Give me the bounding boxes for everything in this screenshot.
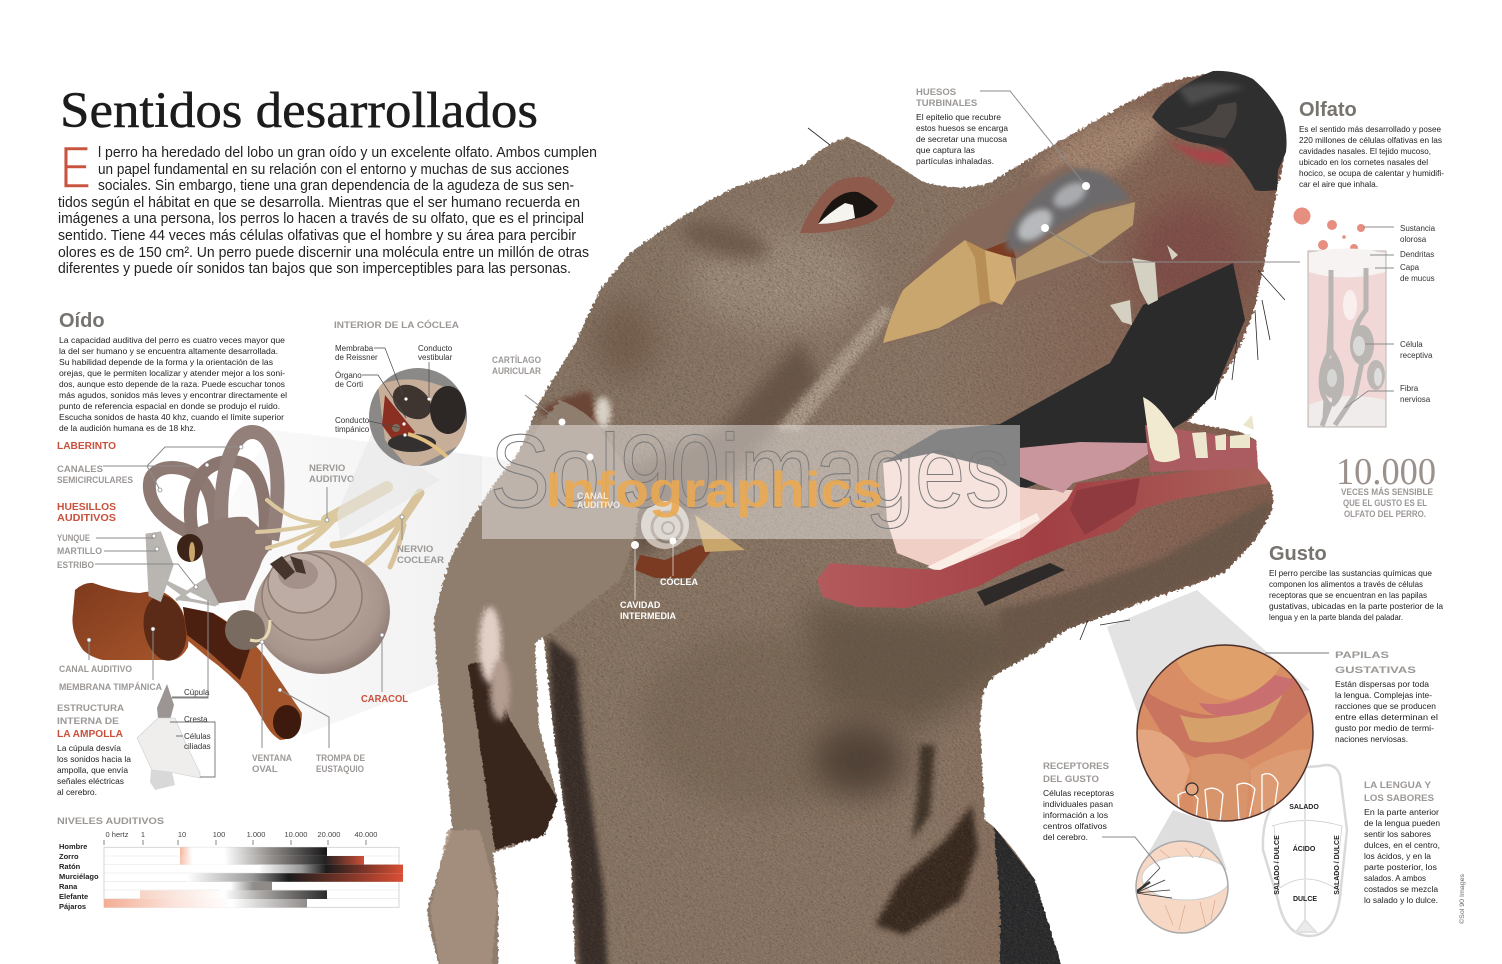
heading: Oído: Oído (59, 310, 105, 332)
frequency axis (106, 830, 377, 839)
leader lines: olfactory (1345, 227, 1394, 408)
heading: Olfato: Olfato (1299, 99, 1357, 121)
text block: Olfato: cavidades nasales. El tejido mucoso, (1299, 146, 1431, 156)
labels: olfactory: nerviosa (1400, 395, 1431, 404)
label: CARACOL: CARACOL (361, 693, 409, 705)
text block: ampulla: La cúpula desvía (57, 743, 121, 753)
labels: olfactory: Fibra (1400, 384, 1419, 393)
label: HUESOS TURBINALES: HUESOS (916, 87, 956, 98)
labels: ossicles (57, 533, 102, 571)
text block: huesos turbinales: estos huesos se encarga (916, 123, 1008, 133)
panel: grey magnifying wedge from ear to inner-ear diagram (230, 430, 640, 735)
text block: Oído (59, 335, 287, 433)
tissue block (1308, 251, 1386, 427)
text block: PAPILAS GUSTATIVAS: PAPILAS (1335, 650, 1389, 661)
text block: PAPILAS GUSTATIVAS: Están dispersas por toda (1335, 679, 1429, 689)
label: HUESILLOS AUDITIVOS (57, 501, 116, 524)
intro text: diferentes y puede oír sonidos tan bajos que son imperceptibles para las personas. (58, 260, 571, 277)
illustration: ampulla internal structure (137, 684, 215, 790)
label: CAVIDAD INTERMEDIA: INTERMEDIA (620, 611, 676, 621)
callout: 10.000: VECES MÁS SENSIBLE (1341, 487, 1433, 498)
text block: Gusto: El perro percibe las sustancias químicas que (1269, 568, 1432, 578)
text block: Oído: dos, aunque esto depende de la raza. Puede escuchar tonos (59, 379, 285, 389)
labels: cochlea parts: de Corti (335, 380, 363, 389)
label: NERVIO AUDITIVO: NERVIO (309, 463, 345, 474)
leader lines: nasal (980, 91, 1300, 262)
text block: LA LENGUA Y LOS SABORES: salados. A ambos (1364, 873, 1426, 883)
text block: LA LENGUA Y LOS SABORES: LA LENGUA Y (1364, 780, 1432, 791)
text block: LA LENGUA Y LOS SABORES (1364, 780, 1440, 905)
text block: PAPILAS GUSTATIVAS (1335, 650, 1438, 744)
text block: Olfato: hocico, se ocupa de calentar y humidifi- (1299, 168, 1444, 178)
ossicles: anvil, hammer, stirrup (147, 533, 218, 605)
gums (1145, 425, 1258, 472)
text block: Oído: punto de referencia espacial en donde se produjo el ruido. (59, 401, 280, 411)
panel: Gusto (1269, 543, 1443, 622)
receptor cells (1321, 270, 1342, 426)
frequency axis: 1 (141, 830, 145, 839)
text block: ampulla: al cerebro. (57, 787, 97, 797)
copyright: ©Sol 90 Images (1458, 873, 1466, 924)
frequency axis: 20.000 (318, 830, 340, 839)
label: NERVIO AUDITIVO: AUDITIVO (309, 474, 354, 485)
intro text: l perro ha heredado del lobo un gran oído y un excelente olfato. Ambos cumplen (98, 144, 597, 161)
text block: ampulla: los sonidos hacia la (57, 754, 131, 764)
text block: Oído: más agudos, sonidos más leves y encontrar directamente el (59, 390, 287, 400)
leader lines: ear labels (635, 541, 673, 600)
text block: LA LENGUA Y LOS SABORES: los ácidos, y en la (1364, 851, 1431, 861)
text block: Olfato (1299, 124, 1444, 189)
tongue labels: SALADO (1289, 804, 1319, 811)
tongue labels: DULCE (1293, 896, 1317, 903)
labels: ossicles: ESTRIBO (57, 560, 94, 571)
text block: huesos turbinales: de secretar una mucosa (916, 134, 1007, 144)
text block: ampulla: INTERNA DE (57, 716, 119, 727)
label: HUESILLOS AUDITIVOS: AUDITIVOS (57, 512, 116, 524)
chart: cochlea cross-section (337, 368, 470, 540)
tongue (1020, 442, 1150, 493)
callout: 10.000 (1336, 451, 1436, 520)
dog shading (538, 94, 1272, 964)
labels: ossicles: MARTILLO (57, 546, 102, 557)
heading: NIVELES AUDITIVOS: NIVELES AUDITIVOS (57, 816, 164, 827)
labels: ampulla parts (184, 688, 211, 751)
shadow under lip (977, 563, 1065, 606)
intro text: sentido. Tiene 44 veces más células olfativas que el hombre y su área para percibir (58, 227, 576, 244)
text block: PAPILAS GUSTATIVAS: racciones que se producen (1335, 701, 1436, 711)
text block: Gusto: componen los alimentos a través de células (1269, 579, 1423, 589)
label: VENTANA OVAL: VENTANA (252, 753, 292, 764)
labels: olfactory: de mucus (1400, 274, 1435, 283)
text block: huesos turbinales: El epitelio que recubre (916, 112, 1001, 122)
text block: LA LENGUA Y LOS SABORES: LOS SABORES (1364, 793, 1434, 804)
leader line: receptor (1102, 837, 1160, 868)
eustachian tube (183, 607, 302, 740)
label: LABERINTO: LABERINTO (57, 440, 116, 452)
watermark: Infographics: Infographics (546, 462, 883, 518)
label: CANAL AUDITIVO on dog: CANAL (577, 491, 609, 501)
text block: Olfato: ubicado en los cornetes nasales del (1299, 157, 1428, 167)
odor molecules (1294, 208, 1365, 263)
tongue labels (1274, 804, 1341, 903)
watermark: Sol90images: Sol90images (490, 414, 1010, 530)
label: CARTÍLAGO AURICULAR: CARTÍLAGO (492, 355, 541, 366)
label: CANAL AUDITIVO on dog: AUDITIVO (577, 500, 620, 510)
text block: Oído: Escucha sonidos de hasta 40 khz, cuando el límite superior (59, 412, 284, 422)
cochlear nerve (333, 493, 420, 567)
tongue labels: SALADO / DULCE (1274, 835, 1281, 895)
illustration: nasal cavity cutaway (883, 163, 1138, 343)
row labels: Elefante (59, 892, 88, 901)
semicircular canals (149, 468, 216, 540)
leader line: papilas (1265, 652, 1329, 654)
text block: ampulla: LA AMPOLLA (57, 728, 123, 740)
label: CANAL AUDITIVO on dog (577, 491, 620, 510)
label: NERVIO AUDITIVO (309, 463, 354, 485)
chart: hearing levels (57, 816, 403, 911)
frequency axis: 10.000 (285, 830, 307, 839)
label: CAVIDAD INTERMEDIA (620, 600, 676, 621)
lower lip (817, 467, 1270, 608)
label: CARTÍLAGO AURICULAR: AURICULAR (492, 366, 541, 377)
callout: 10.000: 10.000 (1336, 451, 1436, 493)
frequency axis: 10 (178, 830, 186, 839)
panel: Oído text (59, 310, 287, 433)
labels: cochlea parts: Conducto (335, 416, 370, 425)
text block: LA LENGUA Y LOS SABORES: En la parte anterior (1364, 807, 1439, 817)
text block: RECEPTORES DEL GUSTO: DEL GUSTO (1043, 774, 1099, 785)
text block: RECEPTORES DEL GUSTO: Células receptoras (1043, 788, 1114, 798)
diagram: olfactory epithelium (1294, 208, 1436, 427)
labels: ossicles: YUNQUE (57, 533, 90, 544)
text block: LA LENGUA Y LOS SABORES: parte posterior, los (1364, 862, 1437, 872)
label: CARTÍLAGO AURICULAR (492, 355, 541, 377)
callout: 10.000: OLFATO DEL PERRO. (1344, 509, 1426, 520)
heading: Gusto: Gusto (1269, 543, 1327, 565)
text block: ampulla: señales eléctricas (57, 776, 124, 786)
row labels: Rana (59, 882, 78, 891)
row labels: Zorro (59, 852, 79, 861)
drop cap E: E (60, 134, 91, 201)
frequency axis: 0 hertz (106, 830, 129, 839)
text block: PAPILAS GUSTATIVAS: entre ellas determinan el (1335, 712, 1438, 722)
labels: ampulla parts: Cúpula (184, 688, 210, 697)
label: CANALES SEMICIRCULARES: CANALES (57, 464, 103, 475)
text block: huesos turbinales: partículas inhaladas. (916, 156, 994, 166)
illustration: dog ear (427, 397, 640, 964)
label: CAVIDAD INTERMEDIA: CAVIDAD (620, 600, 661, 610)
dots: nasal (1041, 182, 1090, 232)
tongue labels: ÁCIDO (1293, 844, 1316, 853)
text block: RECEPTORES DEL GUSTO: individuales pasan (1043, 799, 1113, 809)
labels: cochlea parts: Membraba (335, 344, 374, 353)
text block: huesos turbinales: que captura las (916, 145, 975, 155)
white lower gum strip (927, 513, 1040, 572)
text block: ampulla (57, 703, 131, 797)
text block: PAPILAS GUSTATIVAS: GUSTATIVAS (1335, 665, 1416, 676)
text block: LA LENGUA Y LOS SABORES: dulces, en el centro, (1364, 840, 1440, 850)
text block: LA LENGUA Y LOS SABORES: de la lengua pueden (1364, 818, 1440, 828)
label: TROMPA DE EUSTAQUIO: TROMPA DE (316, 753, 365, 764)
tympanic membrane (139, 592, 191, 664)
frequency axis: 40.000 (355, 830, 377, 839)
fur texture (490, 70, 1290, 964)
text block: Oído: de la audición humana es de 18 khz. (59, 423, 196, 433)
labels: ampulla parts: Células (184, 732, 211, 741)
text block: Gusto (1269, 568, 1443, 622)
whiskers (808, 128, 1285, 640)
row labels: Hombre (59, 842, 87, 851)
labels: olfactory: Capa (1400, 263, 1420, 272)
label: CÓCLEA: CÓCLEA (660, 576, 698, 587)
ear canal (72, 583, 188, 660)
text block: RECEPTORES DEL GUSTO: RECEPTORES (1043, 761, 1109, 772)
lower lip fold (1070, 478, 1140, 535)
chart frame (104, 847, 399, 907)
drool (1110, 245, 1178, 325)
inner mouth pale (883, 453, 1075, 570)
illustration: nose (1152, 71, 1287, 191)
illustration: eye (800, 177, 895, 233)
labels: cochlea parts: timpánico (335, 425, 370, 434)
text block: ampulla: ESTRUCTURA (57, 703, 124, 714)
label: NERVIO COCLEAR (397, 544, 444, 566)
panel: taste magnifying wedges (1107, 590, 1310, 873)
text block: PAPILAS GUSTATIVAS: gusto por medio de termi- (1335, 723, 1434, 733)
labels: olfactory: receptiva (1400, 351, 1433, 360)
row labels: Murciélago (59, 872, 99, 881)
label: HUESOS TURBINALES: TURBINALES (916, 98, 977, 109)
text block: RECEPTORES DEL GUSTO: del cerebro. (1043, 832, 1088, 842)
text block: Olfato: car el aire que inhala. (1299, 179, 1378, 189)
label: VENTANA OVAL: OVAL (252, 764, 278, 775)
labels: cochlea parts: Órgano (335, 371, 362, 380)
label: VENTANA OVAL (252, 753, 292, 775)
illustration: open mouth (817, 245, 1270, 608)
frequency axis: 100 (213, 830, 225, 839)
labels: cochlea parts: vestibular (418, 353, 453, 362)
frequency axis: 1.000 (247, 830, 265, 839)
leader lines: inner ear (89, 395, 558, 748)
text block: Gusto: receptoras que se encuentran en las papilas (1269, 590, 1427, 600)
intro text: olores es de 150 cm². Un perro puede discernir una molécula entre un millón de otras (58, 244, 589, 261)
diagram: taste papillae magnified (1136, 644, 1314, 822)
text block: LA LENGUA Y LOS SABORES: lo salado y lo dulce. (1364, 895, 1438, 905)
label: NERVIO COCLEAR: COCLEAR (397, 555, 444, 566)
tongue labels: SALADO / DULCE (1334, 835, 1341, 895)
text block: huesos turbinales (916, 112, 1008, 166)
dog body silhouette (500, 73, 1285, 964)
leader lines: cochlea (362, 348, 429, 428)
label: NERVIO COCLEAR: NERVIO (397, 544, 433, 555)
labels: cochlea parts (335, 344, 453, 434)
watermark panel (482, 414, 1020, 539)
vestibule (196, 517, 272, 604)
diagram: tongue map (1263, 765, 1347, 936)
diagram: taste receptor magnified (1136, 841, 1230, 933)
row labels (59, 842, 99, 911)
labels: cochlea parts: de Reissner (335, 353, 378, 362)
labels: ampulla parts: ciliadas (184, 742, 211, 751)
text block: Gusto: lengua y en la parte blanda del paladar. (1269, 612, 1403, 622)
teeth (1192, 415, 1254, 458)
label: HUESILLOS AUDITIVOS: HUESILLOS (57, 501, 116, 513)
labels: CANAL AUDITIVO and MEMBRANA TIMPÁNICA (59, 664, 162, 693)
intro text: sociales. Sin embargo, tiene una gran dependencia de la agudeza de sus sen- (98, 177, 574, 194)
row labels: Ratón (59, 862, 81, 871)
text block: LA LENGUA Y LOS SABORES: sentir los sabores (1364, 829, 1431, 839)
labels: olfactory: olorosa (1400, 235, 1427, 244)
text block: PAPILAS GUSTATIVAS: naciones nerviosas. (1335, 734, 1408, 744)
label: CANALES SEMICIRCULARES (57, 464, 133, 486)
round window (225, 610, 265, 650)
text block: RECEPTORES DEL GUSTO (1043, 761, 1114, 842)
dots on inner ear (87, 445, 404, 692)
mouth dark interior (883, 263, 1245, 490)
text block: PAPILAS GUSTATIVAS: la lengua. Complejas inte- (1335, 690, 1432, 700)
illustration: small cochlea in the ear (635, 501, 745, 578)
illustration: dog head and neck (490, 70, 1290, 964)
label: TROMPA DE EUSTAQUIO (316, 753, 365, 775)
label: TROMPA DE EUSTAQUIO: EUSTAQUIO (316, 764, 364, 775)
row labels: Pájaros (59, 902, 86, 911)
text block: LA LENGUA Y LOS SABORES: costados se mezcla (1364, 884, 1438, 894)
auditory nerve (257, 487, 387, 548)
label: CANALES SEMICIRCULARES: SEMICIRCULARES (57, 475, 133, 486)
intro text: imágenes a una persona, los perros lo hacen a través de su olfato, que es el principal (58, 210, 584, 227)
text block: Oído: La capacidad auditiva del perro es cuatro veces mayor que (59, 335, 285, 345)
text block: ampulla: ampolla, que envía (57, 765, 128, 775)
text block: Oído: orejas, que le permiten localizar y atender mejor a los soni- (59, 368, 285, 378)
text block: Oído: Su habilidad depende de la forma y la orientación de las (59, 357, 273, 367)
labels: olfactory: Sustancia (1400, 224, 1436, 233)
illustration: inner ear (72, 432, 420, 740)
text block: RECEPTORES DEL GUSTO: centros olfativos (1043, 821, 1107, 831)
text block: Oído: la del ser humano y se encuentra altamente desarrollada. (59, 346, 278, 356)
intro text: tidos según el hábitat en que se desarrolla. Mientras que el ser humano recuerda en (58, 194, 580, 211)
labels: CANAL AUDITIVO and MEMBRANA TIMPÁNICA: CANAL AUDITIVO (59, 664, 132, 675)
text block: Olfato: Es el sentido más desarrollado y posee (1299, 124, 1441, 134)
labels: olfactory: Dendritas (1400, 250, 1434, 259)
text block: Olfato: 220 millones de células olfativas en las (1299, 135, 1442, 145)
dots: ear labels (558, 418, 676, 549)
panel: Olfato (1299, 99, 1444, 189)
intro text (58, 144, 597, 277)
heading: INTERIOR DE LA CÓCLEA: INTERIOR DE LA CÓCLEA (334, 319, 459, 331)
bars (180, 847, 327, 856)
label: HUESOS TURBINALES (916, 87, 977, 109)
labels: olfactory (1400, 224, 1436, 404)
title: Sentidos desarrollados (60, 83, 538, 139)
labels: ampulla parts: Cresta (184, 715, 208, 724)
text block: Gusto: gustativas, ubicadas en la parte posterior de la (1269, 601, 1443, 611)
cochlea (254, 550, 390, 674)
intro text: un papel fundamental en su relación con el entorno y muchas de sus acciones (98, 161, 569, 178)
text block: RECEPTORES DEL GUSTO: información a los (1043, 810, 1108, 820)
labels: olfactory: Célula (1400, 340, 1423, 349)
labels: CANAL AUDITIVO and MEMBRANA TIMPÁNICA: MEMBRANA TIMPÁNICA (59, 682, 162, 693)
canine (1143, 397, 1180, 462)
labels: cochlea parts: Conducto (418, 344, 453, 353)
callout: 10.000: QUE EL GUSTO ES EL (1343, 498, 1427, 509)
